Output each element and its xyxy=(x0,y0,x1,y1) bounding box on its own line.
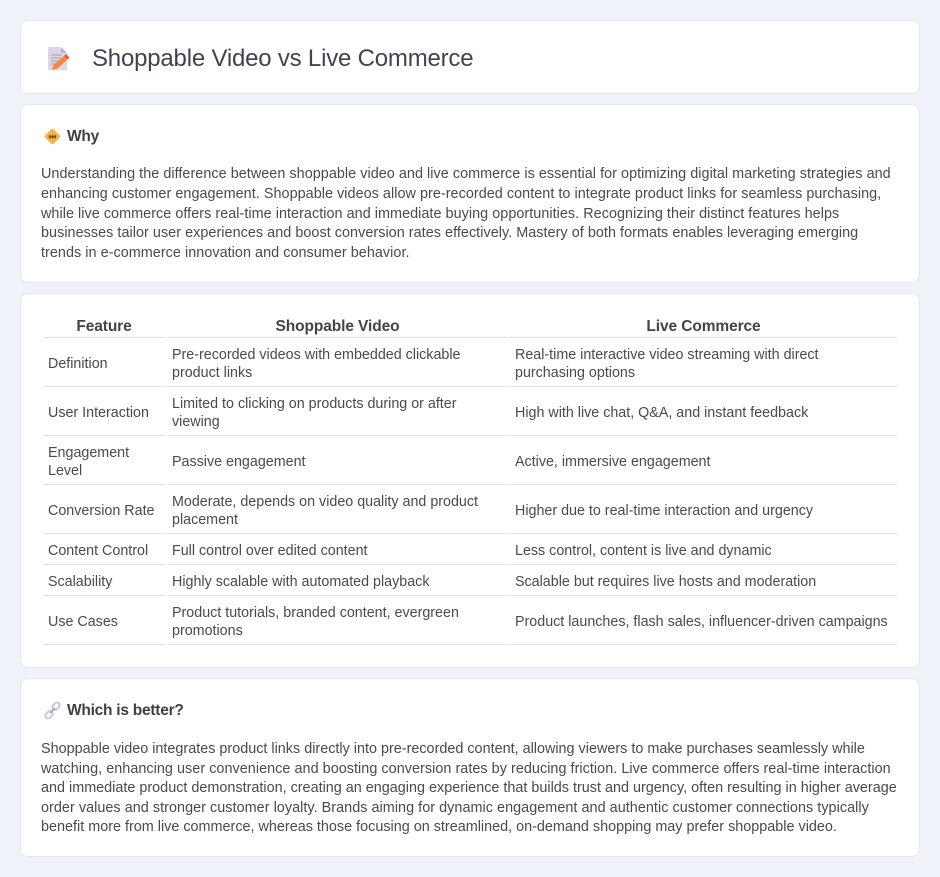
icon: warning diamond xyxy=(44,128,60,144)
row: conversion rate: Moderate, depends on video quality and product xyxy=(172,494,478,510)
table header: Shoppable Video xyxy=(276,318,399,335)
row: definition: Definition xyxy=(48,356,108,372)
table header: Feature xyxy=(76,318,132,335)
row: use cases: Use Cases xyxy=(48,614,118,630)
panel: why card xyxy=(20,104,920,283)
text block: why: businesses tailor user experiences and boost conversion rates effectively. Mastery of both formats enables leveraging emerging xyxy=(41,225,858,241)
row: content control: Content Control xyxy=(48,543,148,559)
row: user interaction xyxy=(48,396,808,430)
row: use cases: promotions xyxy=(172,623,243,639)
panel: comparison table card xyxy=(20,293,920,668)
text block: why: trends in e-commerce innovation and consumer behavior. xyxy=(41,245,410,261)
icon: chain link xyxy=(44,702,61,720)
panel: which is better card xyxy=(20,678,920,857)
row: user interaction: High with live chat, Q&A, and instant feedback xyxy=(515,405,808,421)
row: use cases xyxy=(48,605,888,639)
text block: which is better: watching, enhancing user convenience and boosting conversion rates by reducing friction. Live commerce offers real-time interaction xyxy=(41,761,891,777)
text block: which is better xyxy=(41,741,897,835)
text block: why: Understanding the difference between shoppable video and live commerce is essential for optimizing digital marketing strategies and xyxy=(41,166,891,182)
row: engagement level: Level xyxy=(48,463,82,479)
text block: why: enhancing customer engagement. Shoppable videos allow pre-recorded content to integrate product links for seamless purchasing, xyxy=(41,186,881,202)
text block: why xyxy=(41,166,891,261)
row: user interaction: Limited to clicking on products during or after xyxy=(172,396,456,412)
row: user interaction: User Interaction xyxy=(48,405,149,421)
text block: which is better: order values and stronger customer loyalty. Brands aiming for dynamic engagement and authentic customer connections typically xyxy=(41,800,869,816)
row: conversion rate xyxy=(48,494,813,528)
row: content control: Less control, content is live and dynamic xyxy=(515,543,772,559)
row: scalability: Scalability xyxy=(48,574,112,590)
text block: which is better: benefit more from live commerce, whereas those focusing on streamlined, on-demand shopping may prefer shoppable video. xyxy=(41,819,837,835)
row: definition: Real-time interactive video streaming with direct xyxy=(515,347,819,363)
row: scalability xyxy=(48,574,816,590)
heading: why: Why xyxy=(67,128,99,145)
row: definition xyxy=(48,347,819,381)
row: content control xyxy=(48,543,772,559)
row: engagement level xyxy=(48,445,710,479)
icon: document with pencil xyxy=(48,47,70,70)
row: definition: purchasing options xyxy=(515,365,635,381)
text block: why: while live commerce offers real-time interaction and immediate buying opportunities. Recognizing their distinct features helps xyxy=(41,206,839,222)
row: user interaction: viewing xyxy=(172,414,220,430)
row: content control: Full control over edited content xyxy=(172,543,368,559)
comparison table xyxy=(43,318,897,645)
row: engagement level: Engagement xyxy=(48,445,129,461)
text block: which is better: and immediate product demonstration, creating an engaging experience that builds trust and urgency, often resulting in higher average xyxy=(41,780,897,796)
panel: title card xyxy=(20,20,920,94)
row: use cases: Product tutorials, branded content, evergreen xyxy=(172,605,459,621)
row: conversion rate: placement xyxy=(172,512,238,528)
table header: Live Commerce xyxy=(646,318,761,335)
table header xyxy=(76,318,761,335)
row: scalability: Highly scalable with automated playback xyxy=(172,574,429,590)
row: definition: Pre-recorded videos with embedded clickable xyxy=(172,347,460,363)
heading: which is better: Which is better? xyxy=(67,702,184,719)
row: engagement level: Active, immersive engagement xyxy=(515,454,710,470)
row: use cases: Product launches, flash sales, influencer-driven campaigns xyxy=(515,614,888,630)
text block: which is better: Shoppable video integrates product links directly into pre-recorded content, allowing viewers to make purchases seamlessly while xyxy=(41,741,865,757)
row: conversion rate: Higher due to real-time interaction and urgency xyxy=(515,503,813,519)
row: conversion rate: Conversion Rate xyxy=(48,503,154,519)
title: Shoppable Video vs Live Commerce xyxy=(92,45,473,72)
row: scalability: Scalable but requires live hosts and moderation xyxy=(515,574,816,590)
row: definition: product links xyxy=(172,365,252,381)
row: engagement level: Passive engagement xyxy=(172,454,306,470)
